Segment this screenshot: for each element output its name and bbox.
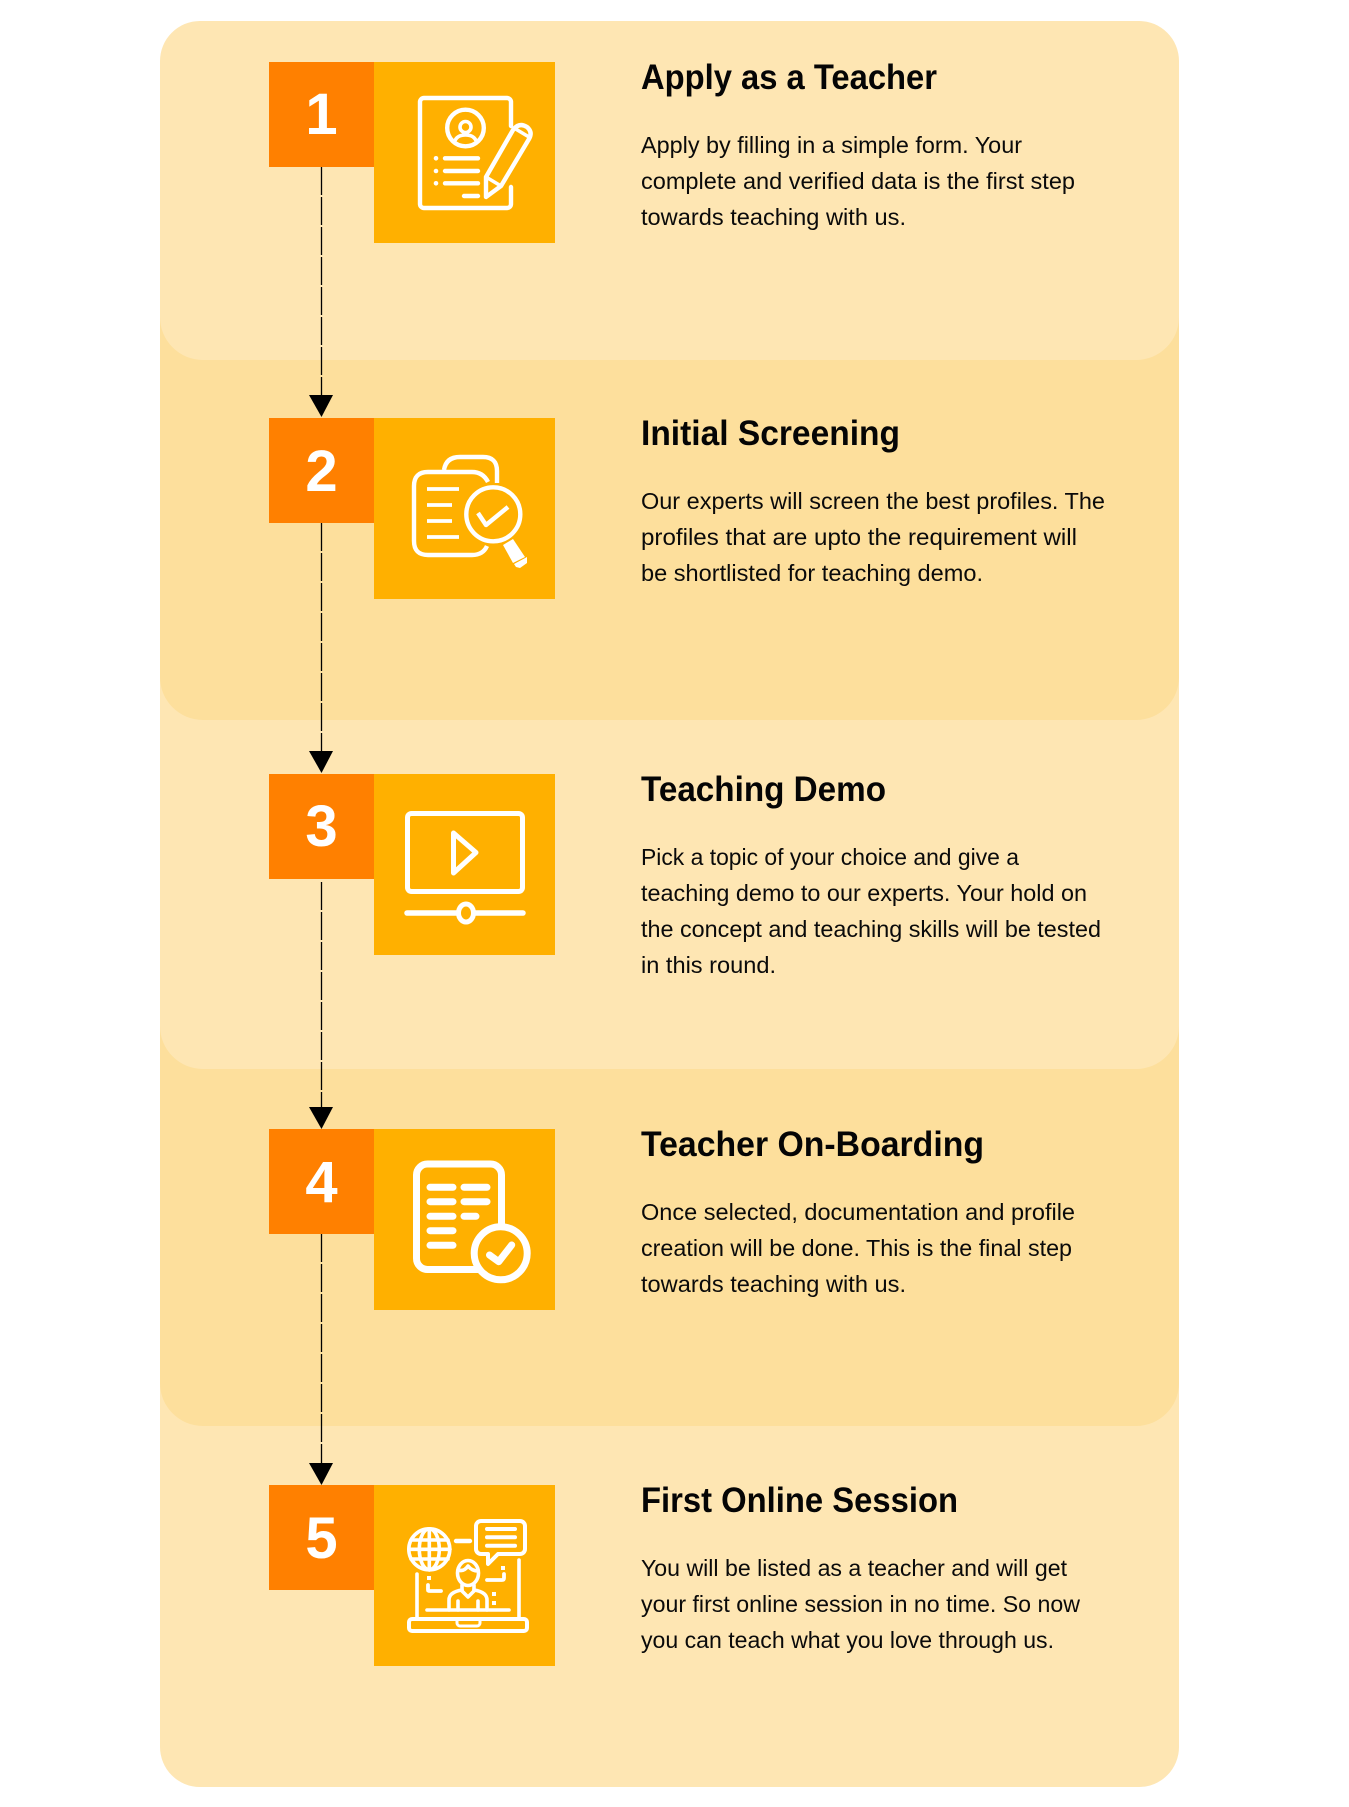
- number badge 1: 1: [305, 82, 338, 147]
- text: step 4 description: creation will be done. This is the final step: [641, 1235, 1072, 1261]
- text: step 2 description: [641, 488, 1105, 586]
- panel: step 1 background: [160, 21, 1179, 360]
- text: step 3 description: teaching demo to our experts. Your hold on: [641, 880, 1087, 906]
- step 1: [269, 58, 1075, 243]
- number badge 3: 3: [305, 794, 338, 859]
- text: step 3 description: in this round.: [641, 952, 776, 978]
- arrow: step 1 to step 2: [309, 167, 333, 417]
- text: step 5 description: you can teach what you love through us.: [641, 1627, 1054, 1653]
- step 5: [269, 1481, 1081, 1666]
- text: step 1 description: Apply by filling in a simple form. Your: [641, 132, 1022, 158]
- icon: video player: [374, 774, 555, 955]
- text: step 3 description: the concept and teaching skills will be tested: [641, 916, 1101, 942]
- number badge 4: 4: [305, 1150, 338, 1215]
- panel: step 2 background: [160, 312, 1179, 720]
- arrow: step 4 to step 5: [309, 1234, 333, 1485]
- heading: First Online Session: First Online Session: [641, 1481, 958, 1520]
- text: step 4 description: towards teaching with us.: [641, 1271, 906, 1297]
- text: step 2 description: profiles that are upto the requirement will: [641, 524, 1077, 550]
- number badge 2: [269, 418, 374, 523]
- heading: Teacher On-Boarding: Teacher On-Boarding: [641, 1125, 984, 1164]
- number badge 3: [269, 774, 374, 879]
- panel: step 3 background: [160, 675, 1179, 1069]
- panel: step 4 background: [160, 1020, 1179, 1426]
- arrow: step 2 to step 3: [309, 523, 333, 773]
- number badge 5: 5: [305, 1506, 338, 1571]
- text: step 4 description: Once selected, documentation and profile: [641, 1199, 1075, 1225]
- heading: Initial Screening: Initial Screening: [641, 414, 900, 453]
- step 4: [269, 1125, 1075, 1310]
- text: step 1 description: [641, 132, 1075, 230]
- text: step 1 description: complete and verified data is the first step: [641, 168, 1075, 194]
- step 2: [269, 414, 1105, 599]
- icon: online teacher on laptop: [374, 1485, 555, 1666]
- number badge 4: [269, 1129, 374, 1234]
- number badge 1: [269, 62, 374, 167]
- text: step 5 description: [641, 1555, 1081, 1653]
- icon: approved document: [374, 1129, 555, 1310]
- text: step 2 description: Our experts will screen the best profiles. The: [641, 488, 1105, 514]
- text: step 3 description: [641, 844, 1101, 978]
- text: step 5 description: your first online session in no time. So now: [641, 1591, 1081, 1617]
- icon: documents under magnifier: [374, 418, 555, 599]
- text: step 5 description: You will be listed as a teacher and will get: [641, 1555, 1067, 1581]
- number badge 5: [269, 1485, 374, 1590]
- heading: Apply as a Teacher: Apply as a Teacher: [641, 58, 937, 97]
- arrow: step 3 to step 4: [309, 882, 333, 1129]
- text: step 4 description: [641, 1199, 1075, 1297]
- heading: Teaching Demo: Teaching Demo: [641, 770, 886, 809]
- text: step 2 description: be shortlisted for teaching demo.: [641, 560, 983, 586]
- panel: step 5 background: [160, 1380, 1179, 1787]
- text: step 1 description: towards teaching with us.: [641, 204, 906, 230]
- text: step 3 description: Pick a topic of your choice and give a: [641, 844, 1020, 870]
- icon: application form with pencil: [374, 62, 555, 243]
- step 3: [269, 770, 1101, 978]
- number badge 2: 2: [305, 439, 338, 504]
